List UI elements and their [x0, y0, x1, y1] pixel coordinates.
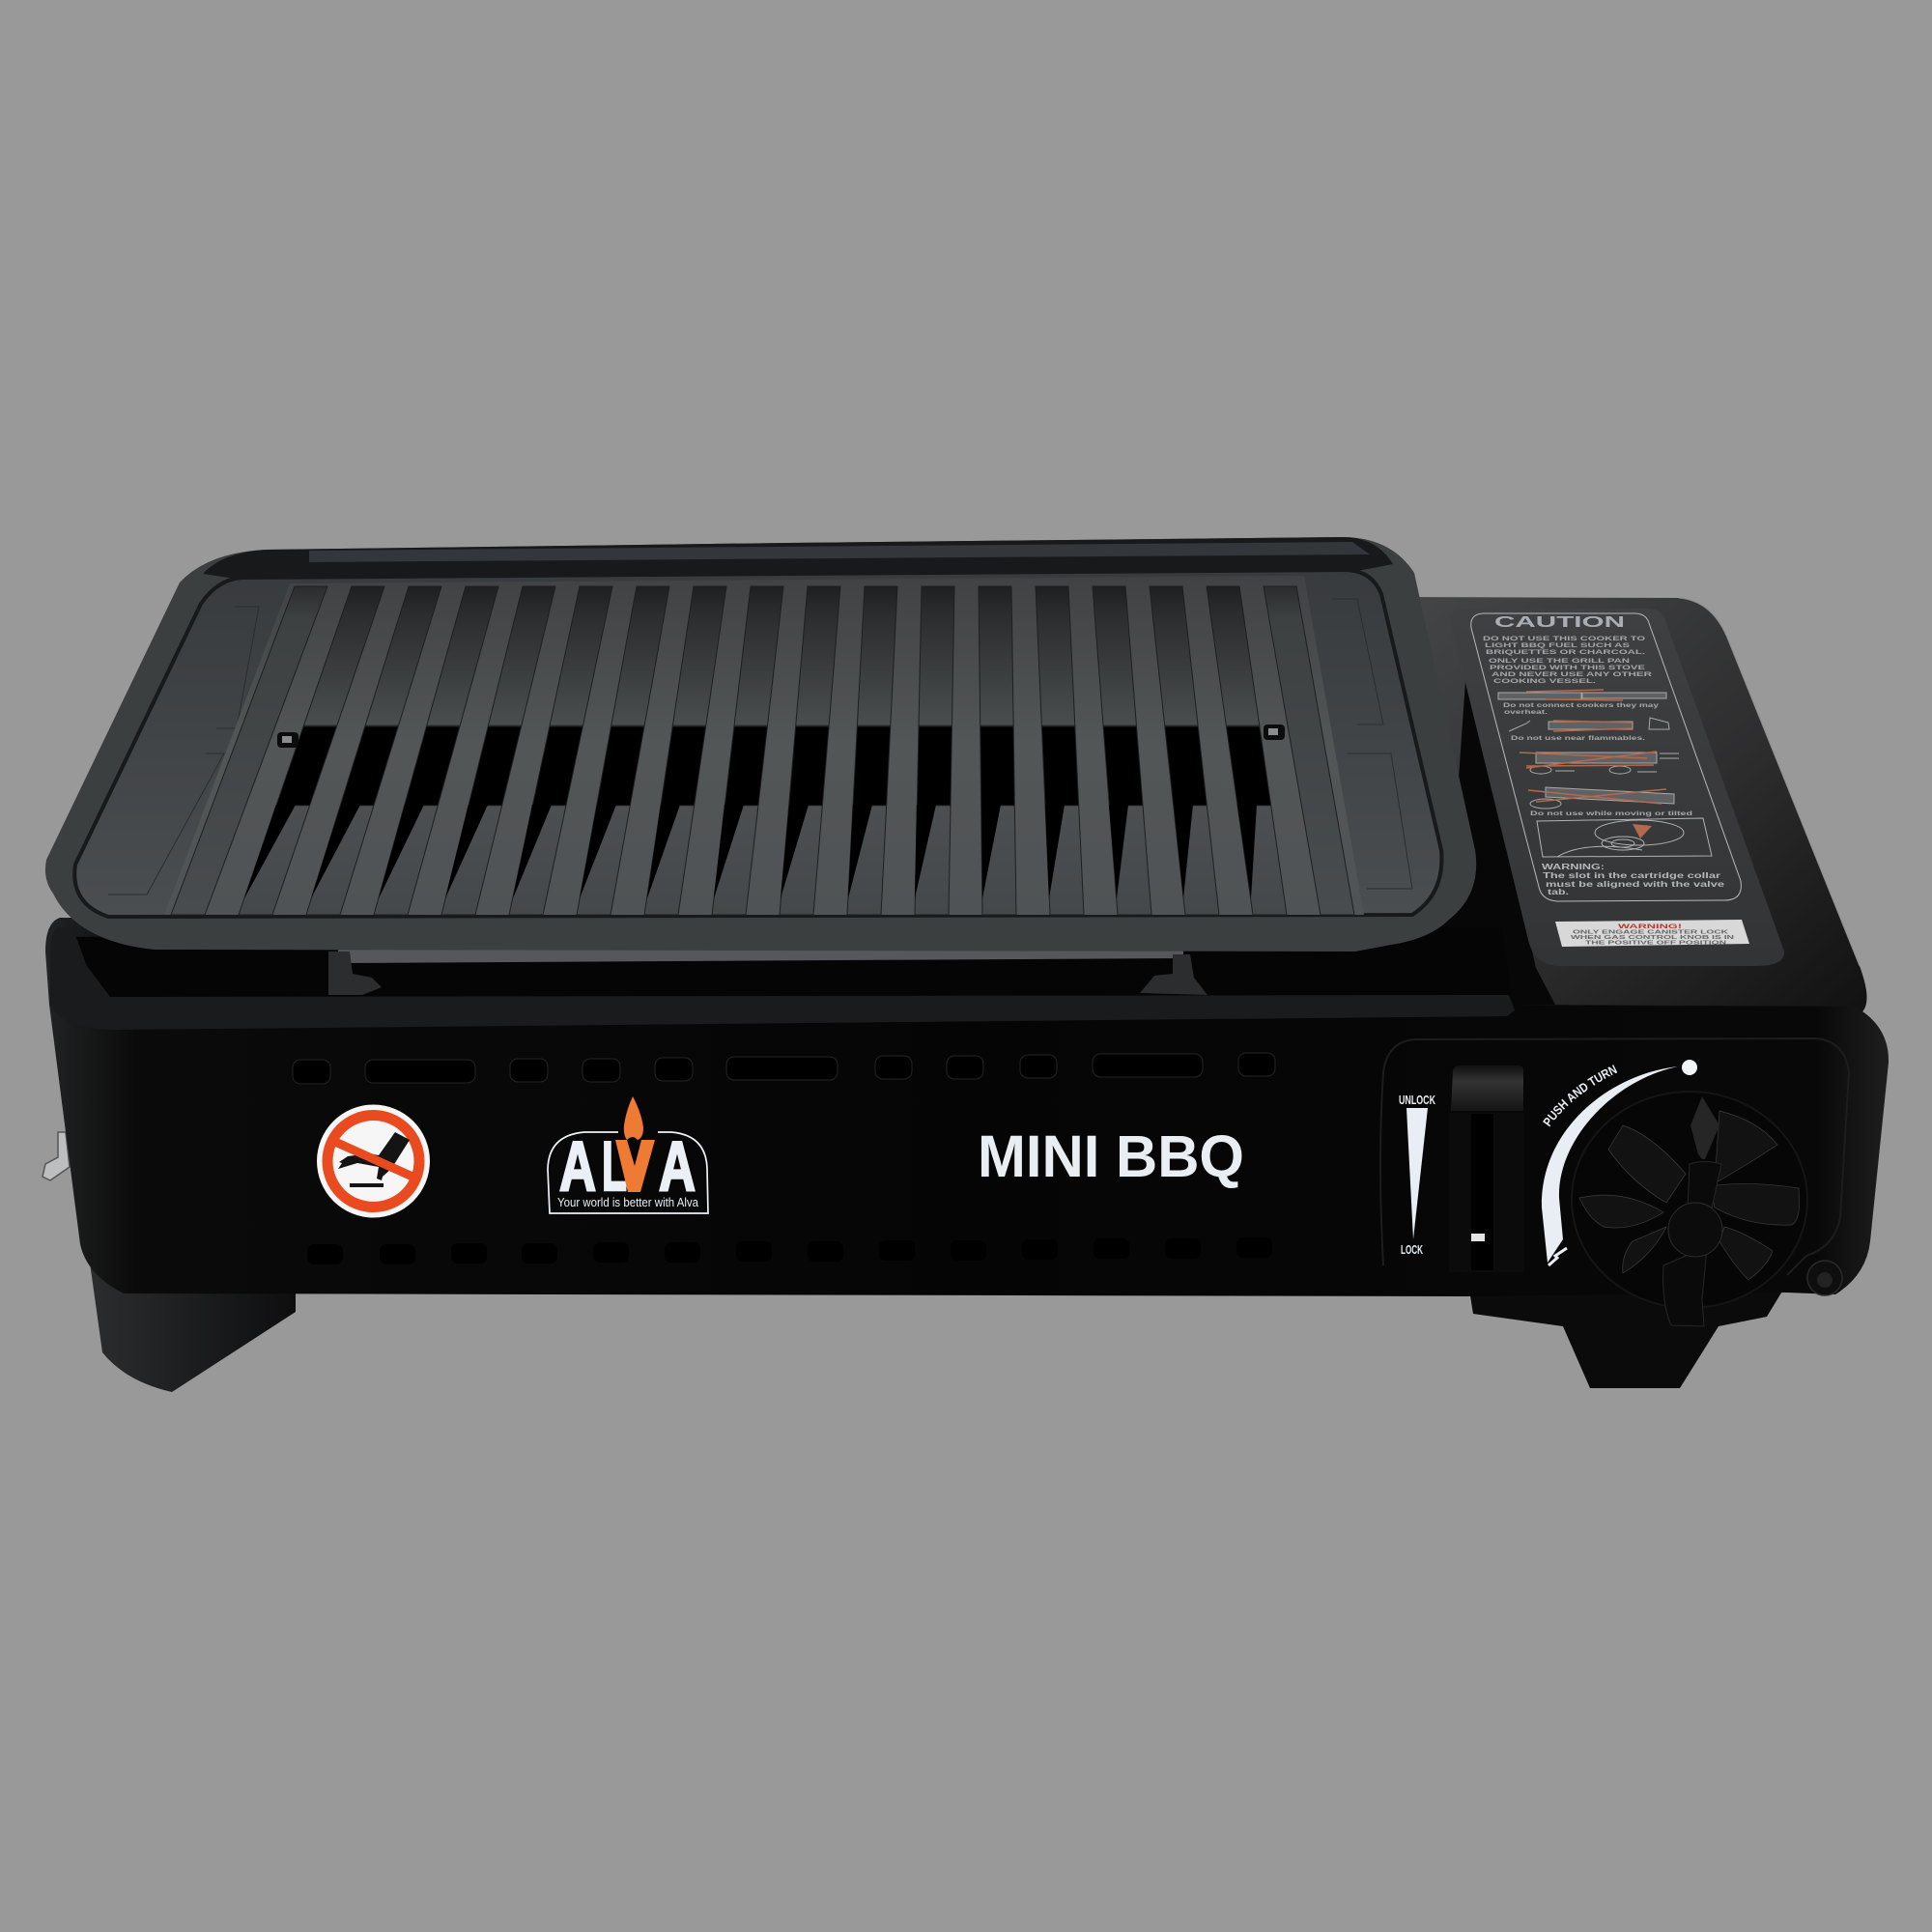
push and turn dial marking: PUSH AND TURN	[1543, 1065, 1617, 1126]
warning sticker	[1555, 920, 1749, 947]
diagram: tilted cooker	[1528, 787, 1674, 809]
control panel outline	[1380, 1038, 1849, 1275]
caution heading: CAUTION	[1494, 614, 1625, 631]
right foot	[1469, 1290, 1783, 1388]
product name: MINI BBQ	[978, 1123, 1244, 1189]
warning sticker: WARNING!	[1618, 923, 1682, 930]
warning instructions: WARNING:	[1542, 863, 1605, 871]
caution instructions: overheat.	[1504, 709, 1548, 716]
caution instructions: LIGHT BBQ FUEL SUCH AS	[1485, 642, 1631, 649]
warning sticker: THE POSITIVE OFF POSITION	[1585, 941, 1726, 947]
warning sticker: ONLY ENGAGE CANISTER LOCK	[1573, 929, 1728, 935]
diagram: flammables	[1509, 718, 1669, 731]
front top lip	[50, 966, 1515, 1030]
canister lock indicator: LOCK	[1401, 1243, 1423, 1257]
caution instructions: BRIQUETTES OR CHARCOAL.	[1486, 649, 1645, 656]
control knob	[1572, 1092, 1807, 1326]
warning sticker: WHEN GAS CONTROL KNOB IS IN	[1571, 935, 1734, 941]
logo: Alva: A	[659, 1128, 696, 1206]
caution instructions: Do not use near flammables.	[1511, 735, 1645, 742]
pan cooking surface	[74, 570, 1441, 917]
stove body front	[45, 918, 1889, 1296]
right pan bracket	[1140, 954, 1208, 995]
metal side clip	[43, 1132, 70, 1180]
left foot	[89, 1256, 296, 1392]
grill slots	[171, 586, 1354, 915]
logo: Alva: L	[602, 1128, 627, 1206]
lower vent slots	[307, 1237, 1272, 1264]
black wedges between lower slots	[244, 805, 1257, 898]
grill bars	[164, 576, 1364, 915]
warning instructions: tab.	[1548, 888, 1569, 896]
left grill screw	[277, 732, 298, 748]
icon: do not touch hot surface sticker	[317, 1105, 430, 1217]
burner recess under the pan	[50, 927, 1512, 1009]
caution instructions: PROVIDED WITH THIS STOVE	[1490, 665, 1646, 671]
dark top rim band	[203, 537, 1393, 580]
warning instructions: must be aligned with the valve	[1546, 880, 1725, 889]
left pan bracket	[328, 952, 382, 995]
stove right top section	[1391, 597, 1866, 1014]
canister lock indicator: UNLOCK	[1399, 1094, 1435, 1107]
right grill screw	[1264, 724, 1285, 740]
knob pointer handle	[1690, 1096, 1719, 1159]
caution instructions: DO NOT USE THIS COOKER TO	[1483, 636, 1645, 642]
caution instructions: ONLY USE THE GRILL PAN	[1489, 658, 1631, 665]
logo: Alva: Your world is better with Alva	[557, 1196, 698, 1209]
right flat pad outlines	[1331, 599, 1412, 889]
knob blades	[1579, 1111, 1800, 1280]
caution instructions: Do not use while moving or tilted	[1530, 810, 1692, 817]
canister lock indicator	[1399, 1094, 1435, 1257]
crease beside the pan	[1449, 681, 1555, 1005]
pan silhouette and rim	[45, 537, 1476, 952]
push and turn dial marking	[1542, 1060, 1697, 1266]
warning instructions: The slot in the cartridge collar	[1543, 871, 1720, 880]
caution label	[1471, 613, 1749, 947]
caution instructions: AND NEVER USE ANY OTHER	[1492, 671, 1653, 678]
left recess curve	[50, 927, 116, 1005]
logo: Alva	[548, 1096, 708, 1213]
left flat pad outlines	[108, 607, 259, 895]
diagram: moving cooker	[1520, 752, 1679, 774]
speckled rim highlight	[309, 542, 1370, 562]
panel screw	[1807, 1261, 1842, 1295]
diagram: cartridge collar alignment	[1537, 818, 1712, 857]
grill pan	[45, 537, 1476, 952]
caution instructions: COOKING VESSEL.	[1493, 678, 1596, 685]
recessed caution panel	[1449, 609, 1784, 966]
canister lock slider	[1449, 1065, 1524, 1272]
warning instructions	[1542, 863, 1725, 896]
caution instructions: Do not connect cookers they may	[1503, 702, 1660, 709]
upper vent slots	[293, 1053, 1275, 1084]
logo: Alva: A	[559, 1128, 596, 1206]
caution instructions	[1483, 636, 1692, 817]
diagram: connected cookers	[1498, 690, 1666, 700]
label outline	[1471, 613, 1741, 901]
grey support bar	[338, 949, 1183, 963]
